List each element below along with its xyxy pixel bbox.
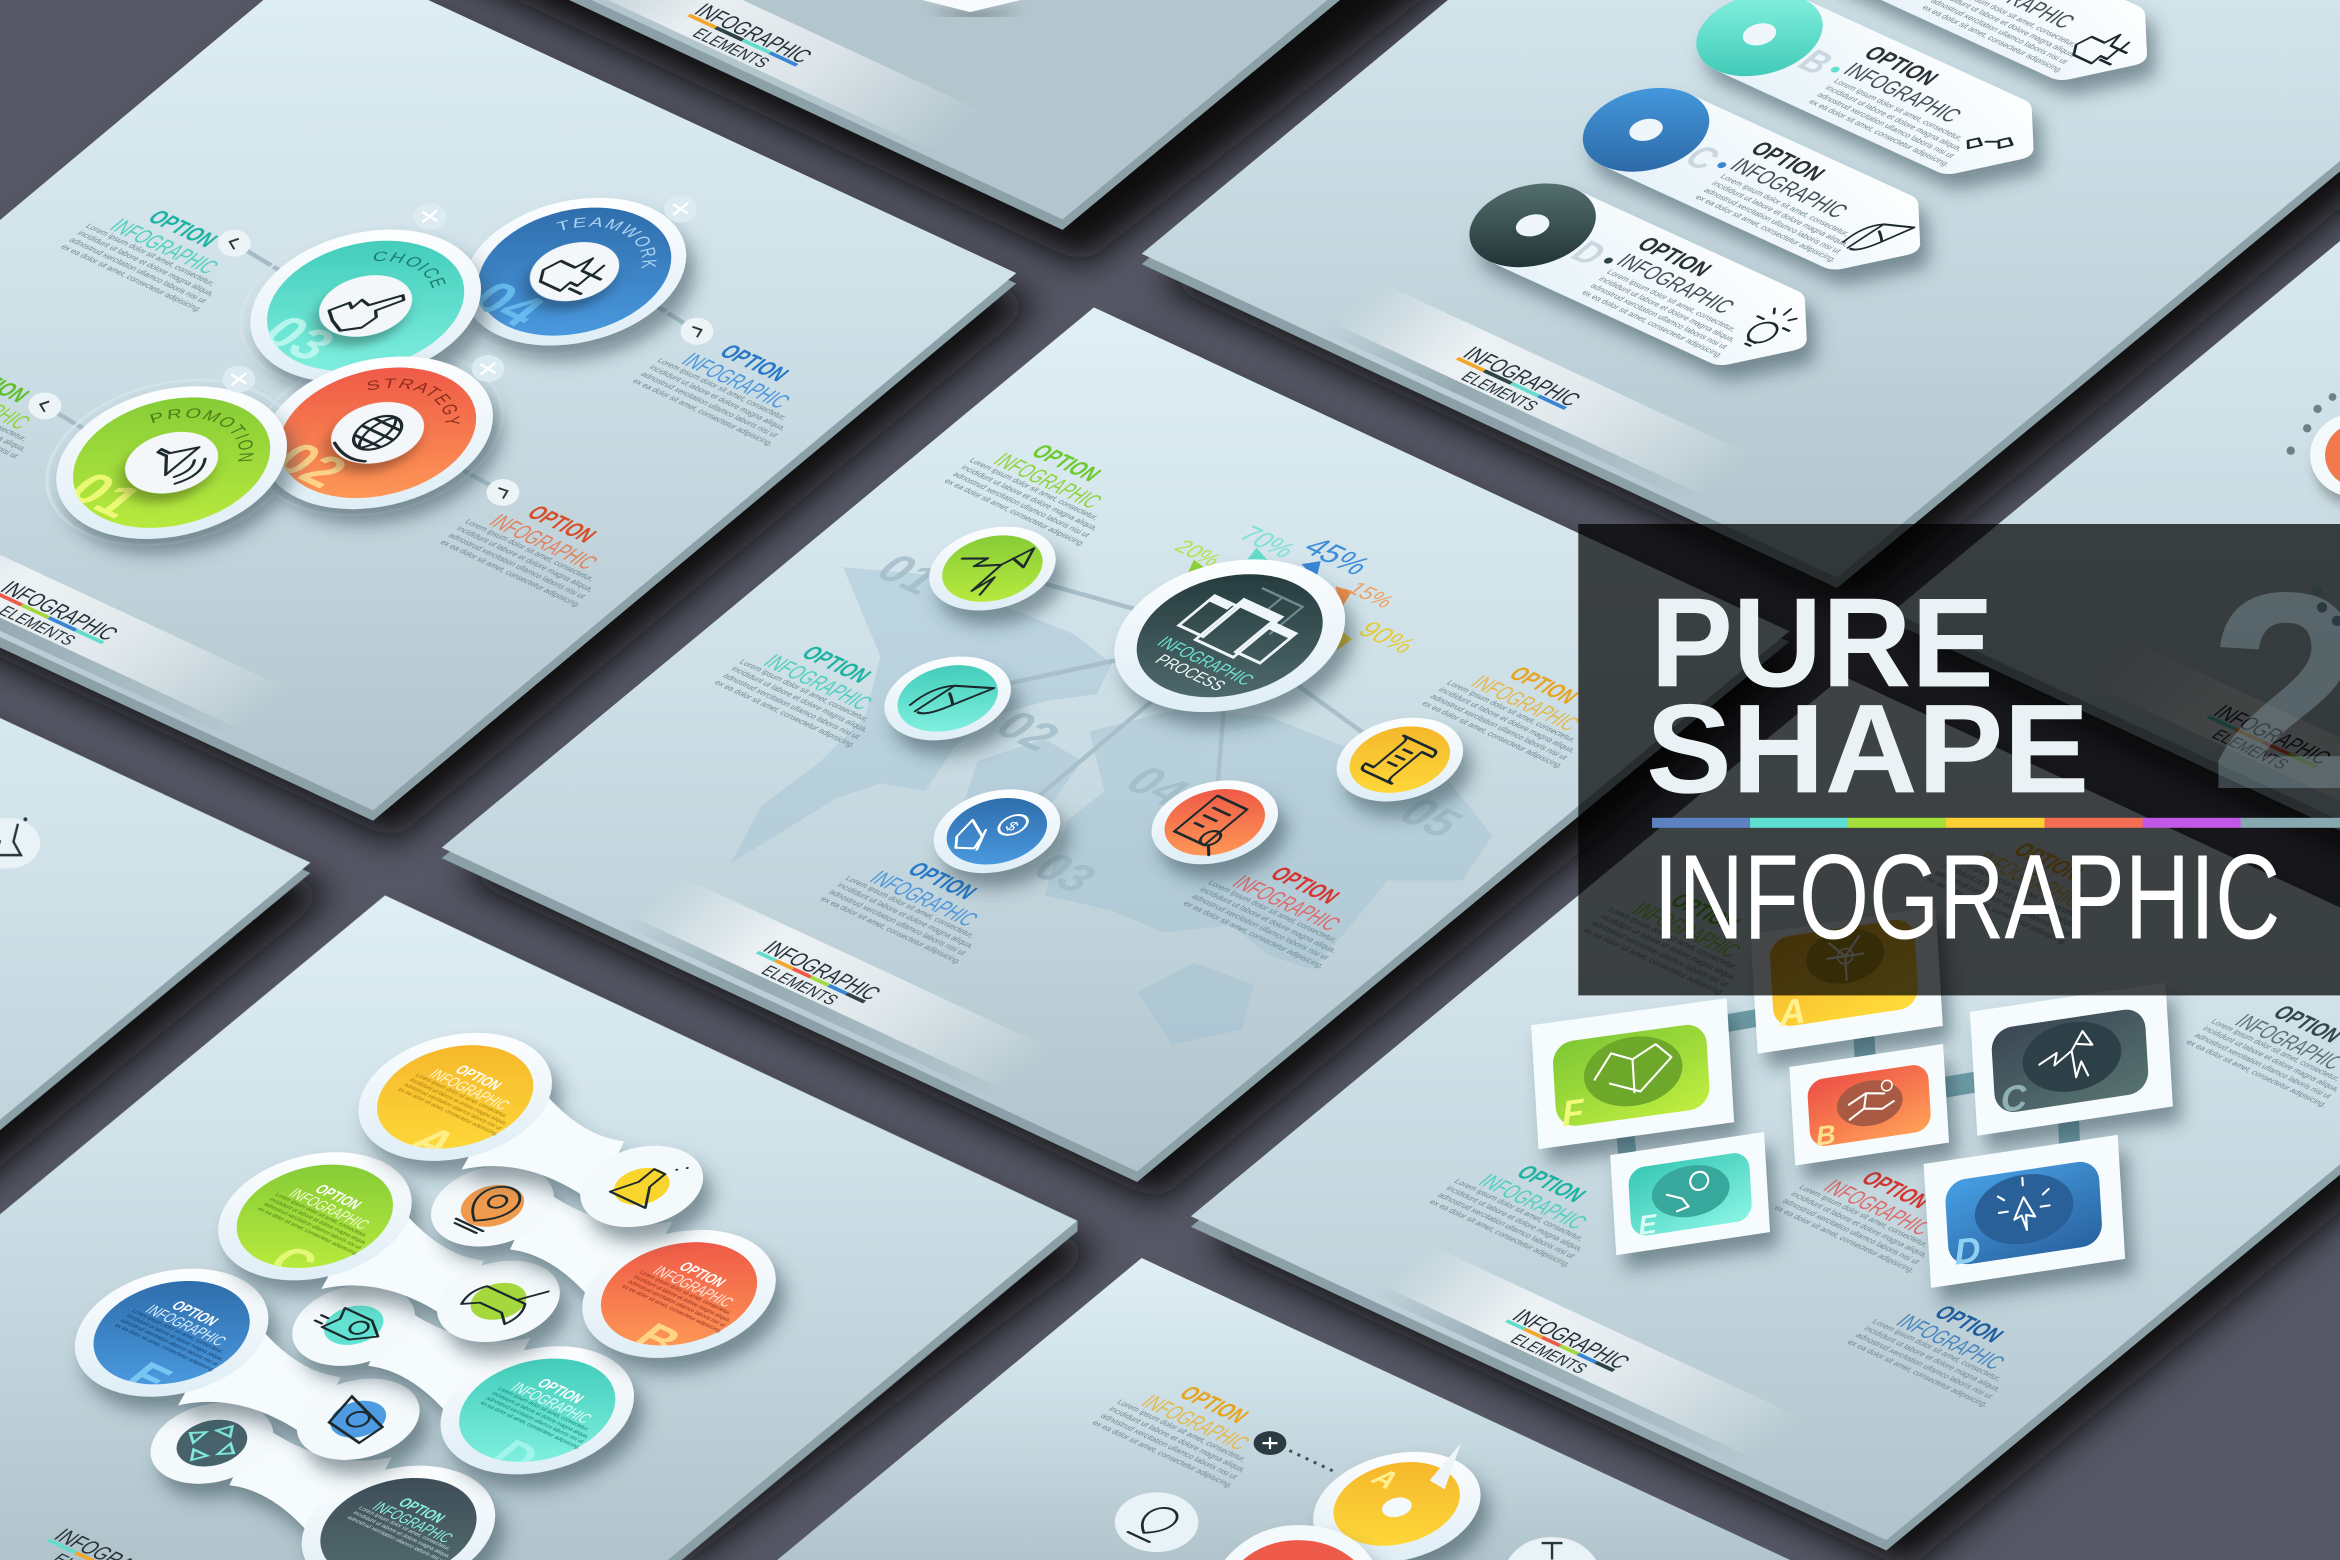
text block: gold option: OPTION (1173, 1383, 1253, 1428)
hub: infographic process: PROCESS (1151, 651, 1231, 694)
text block: dark (2184, 986, 2340, 1109)
tab: option C blue: OPTION (1744, 138, 1830, 186)
text block: dark: adnostrud xercitation ullamco laboris nisi ut (2192, 1031, 2334, 1100)
blob: F dark with arrows: OPTION (394, 1496, 448, 1526)
text block: gold option: INFOGRAPHIC (1135, 1391, 1255, 1455)
tab: option B teal: ex ea dolor sit amet, consectetur adipisicing. (1807, 98, 1952, 168)
blob: A yellow with flask (318, 1009, 728, 1242)
text block: teal: incididunt ut labore et dolore magna aliqua, (1444, 1184, 1585, 1253)
blob: D teal with rocket: D (479, 1432, 551, 1481)
text block: yellow (1924, 824, 2133, 946)
circle: teamwork: 04 (458, 272, 558, 336)
text block: green: Lorem ipsum dolor sit amet, consectetur, (1606, 906, 1740, 971)
footer label: center: ELEMENTS (757, 962, 843, 1008)
title overlay (1578, 524, 2340, 995)
icon: pin (1115, 1492, 1198, 1552)
text block: blue: Lorem ipsum dolor sit amet, consectetur, (1870, 1318, 2004, 1383)
text block: teal: incididunt ut labore et dolore magna aliqua, (729, 665, 871, 734)
text block: blue option: INFOGRAPHIC (675, 350, 795, 413)
tab: option D dark (1443, 167, 1844, 385)
text block: red: Lorem ipsum dolor sit amet, consectetur, (1797, 1183, 1931, 1248)
footer label: bottom right: INFOGRAPHIC (1507, 1305, 1636, 1373)
text block: green: adnostrud xercitation ullamco laboris nisi ut (1589, 920, 1731, 988)
text block: yellow: ex ea dolor sit amet, consectetur adipisicing. (1420, 700, 1565, 770)
text block: teal option: OPTION (142, 207, 222, 252)
text block: red: adnostrud xercitation ullamco laboris nisi ut (1189, 893, 1331, 962)
text block: blue: OPTION (1928, 1302, 2009, 1347)
node: green (903, 511, 1082, 626)
dim step numbers (864, 546, 1474, 901)
node: teal (858, 641, 1037, 756)
panel: far right sheet (1892, 72, 2340, 946)
text block: gold option: adnostrud xercitation ullamco laboris nisi ut (1098, 1412, 1240, 1481)
decoration: dots and orange circle (2287, 393, 2340, 497)
text block: red: incididunt ut labore et dolore magna aliqua, (1789, 1190, 1930, 1259)
text block: teal option: incididunt ut labore et dolore magna aliqua, (75, 229, 217, 298)
text block: red: ex ea dolor sit amet, consectetur adipisicing. (1181, 900, 1326, 970)
card: A yellow (1751, 906, 1943, 1054)
circle: teamwork (468, 198, 706, 372)
blob: C green with gamepad: C (257, 1238, 329, 1287)
circle: A yellow: A (1364, 1464, 1407, 1494)
blob: C green with gamepad: OPTION (311, 1182, 365, 1213)
circle: strategy: STRATEGY (368, 378, 460, 424)
footer label: top middle: ELEMENTS (688, 25, 775, 71)
text block: red: adnostrud xercitation ullamco laboris nisi ut (1780, 1197, 1922, 1266)
text block: green: OPTION (1025, 441, 1106, 486)
node: yellow (1310, 702, 1489, 817)
text block: blue option (630, 325, 839, 448)
text block: blue: adnostrud xercitation ullamco laboris nisi ut (827, 888, 969, 957)
blob: A yellow with flask: OPTION (451, 1063, 505, 1093)
tab: option B teal: B (1788, 44, 1842, 81)
text block: teal: ex ea dolor sit amet, consectetur adipisicing. (1427, 1198, 1573, 1268)
circle: red fragment (1224, 1525, 1373, 1560)
text block: teal option: INFOGRAPHIC (104, 215, 223, 279)
text block: blue: incididunt ut labore et dolore magna aliqua, (835, 881, 977, 950)
tab: option B teal: adnostrud xercitation ullamco laboris nisi ut (1815, 91, 1957, 160)
text block: teal: adnostrud xercitation ullamco laboris nisi ut (721, 672, 863, 741)
text block: blue option: OPTION (713, 341, 794, 386)
blob: C green with gamepad: ex ea dolor sit amet, consectetur adipisicing. (256, 1207, 360, 1257)
text block: yellow: OPTION (2007, 839, 2088, 885)
tab: option D dark: INFOGRAPHIC (1610, 250, 1740, 318)
text block: blue: ex ea dolor sit amet, consectetur adipisicing. (818, 895, 964, 965)
text block: teal: Lorem ipsum dolor sit amet, consectetur, (737, 658, 871, 723)
tab: option C blue (1557, 71, 1957, 290)
blob: F dark with arrows: incididunt ut labore et dolore magna aliqua, (351, 1511, 452, 1559)
circle: A yellow (1279, 1431, 1515, 1560)
text block: blue (818, 843, 1027, 965)
text block: blue: OPTION (901, 859, 982, 904)
text block: red option (438, 486, 646, 609)
card: C dark: C (2000, 1076, 2029, 1120)
circle: teamwork: TEAMWORK (556, 217, 656, 269)
text block: red (1772, 1152, 1980, 1274)
footer label: top middle (564, 0, 985, 154)
card: D blue (1924, 1135, 2125, 1288)
blob: A yellow with flask: INFOGRAPHIC (424, 1066, 514, 1113)
text block: blue: ex ea dolor sit amet, consectetur adipisicing. (1845, 1338, 1991, 1409)
blob: B red with pin: adnostrud xercitation ullamco laboris nisi ut (626, 1280, 727, 1328)
text block: red: incididunt ut labore et dolore magna aliqua, (1198, 886, 1339, 954)
text block: dark: incididunt ut labore et dolore magna aliqua, (2200, 1025, 2340, 1093)
text block: blue: incididunt ut labore et dolore magna aliqua, (1862, 1325, 2003, 1393)
tab: option D dark: Lorem ipsum dolor sit amet, consectetur, (1605, 268, 1738, 333)
text block: blue: INFOGRAPHIC (1890, 1311, 2010, 1374)
blob: C green with gamepad: adnostrud xercitation ullamco laboris nisi ut (262, 1202, 363, 1251)
tab: option B teal: OPTION (1858, 42, 1944, 90)
icon: flask fragment (0, 817, 40, 869)
text block: dark: ex ea dolor sit amet, consectetur adipisicing. (2184, 1038, 2329, 1109)
percent markers: 90% (1352, 617, 1422, 658)
circle: choice (248, 230, 500, 396)
circle: promotion: PROMOTION (150, 408, 254, 462)
panel: left fragment sheet (0, 539, 310, 1413)
text block: green (942, 425, 1151, 548)
percent markers: 70% (1232, 521, 1303, 563)
text block: yellow: INFOGRAPHIC (1969, 848, 2089, 912)
card: E teal: E (1638, 1208, 1658, 1241)
text block: teal (712, 627, 921, 749)
needle (1430, 1443, 1461, 1489)
footer label: center (623, 877, 1054, 1099)
plus marker and dotted link (1254, 1431, 1337, 1473)
footer label: bottom right (1372, 1245, 1803, 1467)
card: B red (1789, 1044, 1949, 1166)
node: red (1125, 765, 1304, 880)
blob: E blue with eye: incididunt ut labore et dolore magna aliqua, (124, 1314, 225, 1362)
text block: red option: Lorem ipsum dolor sit amet, consectetur, (463, 518, 596, 583)
panel: bottom right sheet with cards (1191, 676, 2340, 1551)
world map (731, 567, 1492, 1045)
text block: red: INFOGRAPHIC (1226, 872, 1346, 935)
blob: D teal with rocket: Lorem ipsum dolor sit amet, consectetur, (496, 1386, 591, 1433)
footer label: top right (1323, 283, 1753, 505)
text block: red: OPTION (1855, 1168, 1935, 1213)
panel: top middle sheet (367, 0, 1715, 230)
text block: yellow: Lorem ipsum dolor sit amet, consectetur, (1949, 855, 2083, 920)
circle: strategy (269, 356, 514, 536)
icon: flask (1507, 1537, 1597, 1560)
tab: top partial: ex ea dolor sit amet, consectetur adipisicing. (1920, 4, 2066, 74)
text block: green: incididunt ut labore et dolore magna aliqua, (959, 463, 1100, 532)
text block: teal: INFOGRAPHIC (1472, 1170, 1592, 1234)
panel: center sheet with process hub (442, 307, 1789, 1182)
blob: D teal with rocket (290, 1286, 654, 1501)
tab: option B teal: INFOGRAPHIC (1837, 59, 1966, 127)
card: C dark (1970, 982, 2173, 1136)
blob: D teal with rocket: adnostrud xercitation ullamco laboris nisi ut (484, 1396, 585, 1445)
tab: option D dark: ex ea dolor sit amet, consectetur adipisicing. (1580, 289, 1725, 359)
card: D blue: D (1953, 1228, 1982, 1273)
blob: B red with pin: Lorem ipsum dolor sit amet, consectetur, (637, 1270, 733, 1316)
tab: option D dark: OPTION (1631, 233, 1717, 281)
tab: option C blue: incididunt ut labore et dolore magna aliqua, (1710, 180, 1851, 248)
text block: gold option (1090, 1367, 1298, 1489)
text block: gold option: incididunt ut labore et dolore magna aliqua, (1107, 1405, 1248, 1474)
text block: teal (1427, 1146, 1636, 1268)
blob: F dark with arrows: INFOGRAPHIC (368, 1499, 458, 1546)
text block: green: OPTION (1664, 890, 1744, 935)
text block: yellow: adnostrud xercitation ullamco laboris nisi ut (1932, 869, 2075, 938)
tab: option D dark: adnostrud xercitation ullamco laboris nisi ut (1588, 282, 1730, 351)
text block: gold option: ex ea dolor sit amet, consectetur adipisicing. (1090, 1419, 1235, 1489)
colour stripe (1652, 818, 2340, 828)
blob: B red with pin (406, 1150, 816, 1382)
tab: option D dark: incididunt ut labore et dolore magna aliqua, (1596, 275, 1738, 344)
blob: D teal with rocket: OPTION (533, 1376, 587, 1407)
text block: yellow: incididunt ut labore et dolore magna aliqua, (1436, 686, 1578, 754)
text block: teal: Lorem ipsum dolor sit amet, consectetur, (1452, 1177, 1586, 1242)
blob: E blue with eye: adnostrud xercitation ullamco laboris nisi ut (118, 1318, 219, 1367)
text block: yellow: incididunt ut labore et dolore magna aliqua, (1941, 862, 2082, 931)
panel edge strip (667, 1221, 1077, 1560)
blob: B red with pin: INFOGRAPHIC (648, 1263, 738, 1310)
text block: green: ex ea dolor sit amet, consectetur adipisicing. (942, 477, 1088, 548)
blob: C green with gamepad: Lorem ipsum dolor sit amet, consectetur, (273, 1192, 368, 1239)
card: F green (1531, 998, 1734, 1149)
heading: PURE: PURE (1651, 571, 1994, 713)
blob: E blue with eye: OPTION (167, 1299, 222, 1329)
blob: E blue with eye: E (113, 1354, 183, 1402)
footer label: far right: ELEMENTS (2207, 726, 2294, 772)
nub and plus markers (28, 195, 713, 506)
blob: A yellow with flask: A (397, 1118, 469, 1168)
circle: promotion: 01 (55, 463, 155, 527)
tab: option C blue: C (1675, 139, 1729, 177)
text block: teal option: ex ea dolor sit amet, consectetur adipisicing. (59, 243, 204, 313)
tab tip (922, 0, 1021, 12)
tab: option C blue: ex ea dolor sit amet, consectetur adipisicing. (1693, 193, 1839, 264)
footer label: top right: INFOGRAPHIC (1457, 342, 1587, 410)
text block: blue: INFOGRAPHIC (863, 867, 983, 931)
percent markers: 15% (1342, 578, 1400, 612)
blob: B red with pin: incididunt ut labore et dolore magna aliqua, (632, 1275, 732, 1324)
panel: top left sheet with circles (0, 0, 1016, 821)
text block: yellow: INFOGRAPHIC (1465, 672, 1584, 735)
text block: green: Lorem ipsum dolor sit amet, consectetur, (967, 457, 1101, 522)
connector lines (45, 243, 697, 492)
blob: D teal with rocket: ex ea dolor sit amet, consectetur adipisicing. (478, 1401, 582, 1451)
dim step numbers: 05 (1386, 790, 1474, 846)
card: F green: F (1561, 1090, 1586, 1134)
tab: option C blue: adnostrud xercitation ullamco laboris nisi ut (1702, 186, 1844, 255)
hub: infographic process (1067, 531, 1393, 740)
dim step numbers: 04 (1113, 758, 1202, 815)
node: blue: $ (1001, 819, 1022, 834)
footer label: bottom right: ELEMENTS (1506, 1331, 1592, 1377)
text block: teal option: adnostrud xercitation ullamco laboris nisi ut (67, 236, 209, 305)
blob: D teal with rocket: INFOGRAPHIC (507, 1379, 596, 1427)
blob: A yellow with flask: ex ea dolor sit amet, consectetur adipisicing. (396, 1087, 500, 1137)
tab: option B teal: Lorem ipsum dolor sit amet, consectetur, (1832, 77, 1965, 142)
text block: green: incididunt ut labore et dolore magna aliqua, (1598, 913, 1739, 981)
footer label: top left (0, 517, 291, 739)
blob: B red with pin: OPTION (675, 1260, 729, 1290)
blob: E blue with eye: ex ea dolor sit amet, consectetur adipisicing. (113, 1323, 216, 1373)
node: blue (907, 774, 1086, 889)
text block: green: INFOGRAPHIC (987, 450, 1107, 513)
blob: C green with gamepad (178, 1129, 585, 1357)
blob: F dark with arrows: Lorem ipsum dolor sit amet, consectetur, (357, 1506, 452, 1552)
text block: red option: incididunt ut labore et dolore magna aliqua, (454, 525, 596, 593)
card: B red: B (1815, 1119, 1836, 1152)
text block: yellow: OPTION (1503, 663, 1583, 708)
panel: bottom center sheet (776, 1258, 1792, 1560)
blob: B red with pin: ex ea dolor sit amet, consectetur adipisicing. (620, 1284, 724, 1334)
hub: infographic process: INFOGRAPHIC (1152, 634, 1258, 689)
heading: SHAPE: SHAPE (1646, 677, 2089, 819)
text block: red: Lorem ipsum dolor sit amet, consectetur, (1206, 879, 1340, 944)
footer label: far right (2083, 641, 2340, 855)
footer label: top right: ELEMENTS (1457, 368, 1543, 414)
text block: gold option: Lorem ipsum dolor sit amet, consectetur, (1115, 1398, 1249, 1463)
hub connector lines (946, 569, 1400, 831)
blob: C green with gamepad: incididunt ut labore et dolore magna aliqua, (267, 1197, 368, 1246)
text block: teal: OPTION (795, 642, 876, 688)
percent markers (1169, 521, 1422, 658)
dim step numbers: 01 (864, 546, 952, 603)
footer label: center: INFOGRAPHIC (758, 936, 887, 1004)
title block (1578, 524, 2340, 995)
text block: red (1181, 847, 1389, 970)
tab: option B teal: incididunt ut labore et dolore magna aliqua, (1823, 84, 1965, 153)
blob: A yellow with flask: incididunt ut labore et dolore magna aliqua, (408, 1078, 509, 1127)
text block: red: INFOGRAPHIC (1817, 1176, 1937, 1240)
text block: teal: OPTION (1510, 1162, 1591, 1207)
circle: choice: 03 (249, 306, 349, 371)
text block: blue: adnostrud xercitation ullamco laboris nisi ut (1853, 1331, 1996, 1400)
circle: strategy: 02 (261, 433, 360, 497)
percent markers: 45% (1296, 531, 1379, 581)
card connectors (1616, 1009, 2080, 1164)
text block: teal option (59, 191, 267, 313)
text block: green: INFOGRAPHIC (1626, 899, 1746, 962)
dim step numbers: 03 (1021, 845, 1109, 901)
text block: teal: adnostrud xercitation ullamco laboris nisi ut (1436, 1191, 1578, 1260)
tab: option C blue: Lorem ipsum dolor sit amet, consectetur, (1718, 173, 1852, 238)
card: A yellow: A (1777, 989, 1806, 1034)
text block: yellow: Lorem ipsum dolor sit amet, consectetur, (1445, 679, 1578, 744)
text block: red option: ex ea dolor sit amet, consectetur adipisicing. (438, 538, 583, 609)
text block: yellow (1420, 647, 1628, 770)
halo rings (0, 159, 751, 576)
blob: E blue with eye: INFOGRAPHIC (141, 1302, 231, 1349)
text block: green: ex ea dolor sit amet, consectetur adipisicing. (1581, 926, 1726, 997)
text block: blue (1845, 1286, 2053, 1409)
panel: bottom left sheet with linked blobs (0, 895, 1077, 1560)
text block: green: adnostrud xercitation ullamco laboris nisi ut (951, 470, 1093, 539)
blob: A yellow with flask: Lorem ipsum dolor sit amet, consectetur, (414, 1073, 509, 1119)
tab: top partial (1783, 0, 2184, 100)
text block: green (1581, 874, 1789, 997)
blob: D teal with rocket: incididunt ut labore et dolore magna aliqua, (490, 1391, 591, 1440)
text block: red: ex ea dolor sit amet, consectetur adipisicing. (1772, 1204, 1917, 1274)
circle: choice: CHOICE (374, 252, 446, 288)
text block: blue option: incididunt ut labore et dolore magna aliqua, (647, 363, 789, 432)
blob: E blue with eye (72, 1268, 439, 1488)
text block: red option: adnostrud xercitation ullamco laboris nisi ut (446, 532, 588, 600)
text block: teal: ex ea dolor sit amet, consectetur adipisicing. (712, 679, 858, 749)
blob: A yellow with flask: adnostrud xercitation ullamco laboris nisi ut (402, 1083, 503, 1131)
text block: blue option: adnostrud xercitation ullamco laboris nisi ut (639, 370, 781, 439)
text block: yellow: adnostrud xercitation ullamco laboris nisi ut (1428, 693, 1570, 762)
tab: option B teal (1670, 0, 2071, 194)
circle: promotion (54, 386, 308, 566)
numeral dots (2312, 586, 2340, 626)
text block: blue option: Lorem ipsum dolor sit amet, consectetur, (655, 357, 789, 422)
panel: top right sheet with tabs (1142, 0, 2340, 588)
percent markers: 20% (1169, 536, 1227, 570)
card: E teal (1610, 1132, 1770, 1255)
blob: B red with pin: B (621, 1315, 693, 1365)
footer label: top middle: INFOGRAPHIC (689, 0, 818, 67)
tab: option C blue: INFOGRAPHIC (1724, 155, 1853, 223)
text block: red option: INFOGRAPHIC (483, 511, 603, 574)
blob: F dark with arrows (125, 1387, 535, 1560)
text block: dark: Lorem ipsum dolor sit amet, consectetur, (2209, 1018, 2340, 1083)
text block: yellow: ex ea dolor sit amet, consectetur adipisicing. (1924, 876, 2070, 946)
text block: blue: Lorem ipsum dolor sit amet, consectetur, (843, 874, 977, 939)
text block: teal: INFOGRAPHIC (757, 651, 877, 715)
text block: red option: OPTION (521, 502, 601, 547)
blob: C green with gamepad: INFOGRAPHIC (284, 1185, 374, 1233)
tab: option D dark: D (1561, 235, 1616, 272)
blob: E blue with eye: Lorem ipsum dolor sit amet, consectetur, (130, 1309, 225, 1355)
text block: red: OPTION (1264, 863, 1345, 908)
text block: blue option: ex ea dolor sit amet, consectetur adipisicing. (630, 377, 776, 448)
dim step numbers: 02 (984, 703, 1072, 760)
text block: teal option: Lorem ipsum dolor sit amet, consectetur, (84, 222, 217, 287)
